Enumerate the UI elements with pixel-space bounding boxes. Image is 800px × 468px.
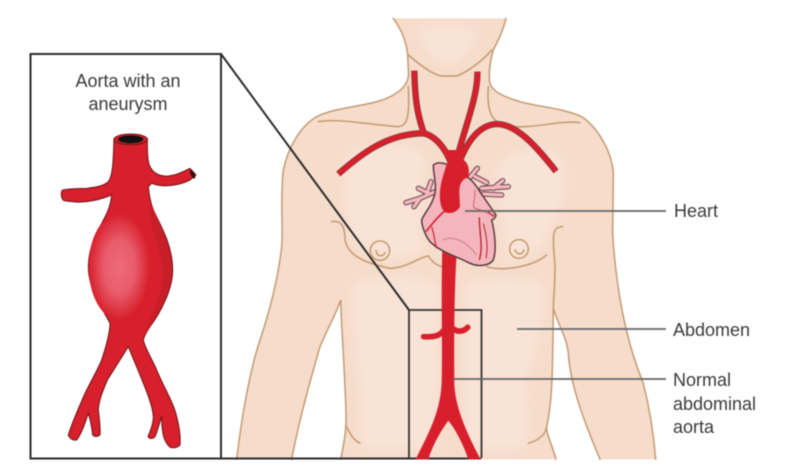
pulmonary branches (406, 168, 508, 207)
panel heading (75, 71, 181, 114)
lighter skin shading (345, 27, 565, 450)
label: Normal abdominal aorta: abdominal (673, 394, 756, 414)
aneurysm vessel shape (61, 138, 196, 448)
top opening (114, 134, 147, 145)
label: Normal abdominal aorta: Normal (673, 370, 731, 390)
label: Normal abdominal aorta (673, 370, 756, 437)
aorta with aneurysm illustration (61, 134, 196, 448)
zoom box on abdomen (409, 310, 482, 458)
panel heading: aneurysm (88, 94, 168, 114)
abdominal aorta (416, 233, 481, 459)
label: Heart: Heart (674, 201, 718, 221)
aortic arch (440, 150, 469, 213)
arteries and heart (338, 71, 556, 459)
inset panel frame (30, 54, 481, 458)
right branch opening (189, 169, 196, 179)
callout lines (453, 211, 666, 379)
human torso illustration (237, 18, 656, 459)
label: Normal abdominal aorta: aorta (673, 417, 715, 437)
body silhouette (237, 18, 656, 459)
heart body (422, 163, 496, 265)
label: Abdomen: Abdomen (673, 320, 750, 340)
body contour lines (237, 18, 656, 459)
darker right side shading (143, 207, 172, 337)
aneurysm highlight (89, 213, 150, 320)
renal arteries (424, 327, 468, 337)
heart (406, 150, 508, 265)
neck and shoulder arteries (338, 71, 556, 174)
panel heading: Aorta with an (75, 71, 181, 91)
heart surface lines and coronary vessels (443, 238, 477, 255)
